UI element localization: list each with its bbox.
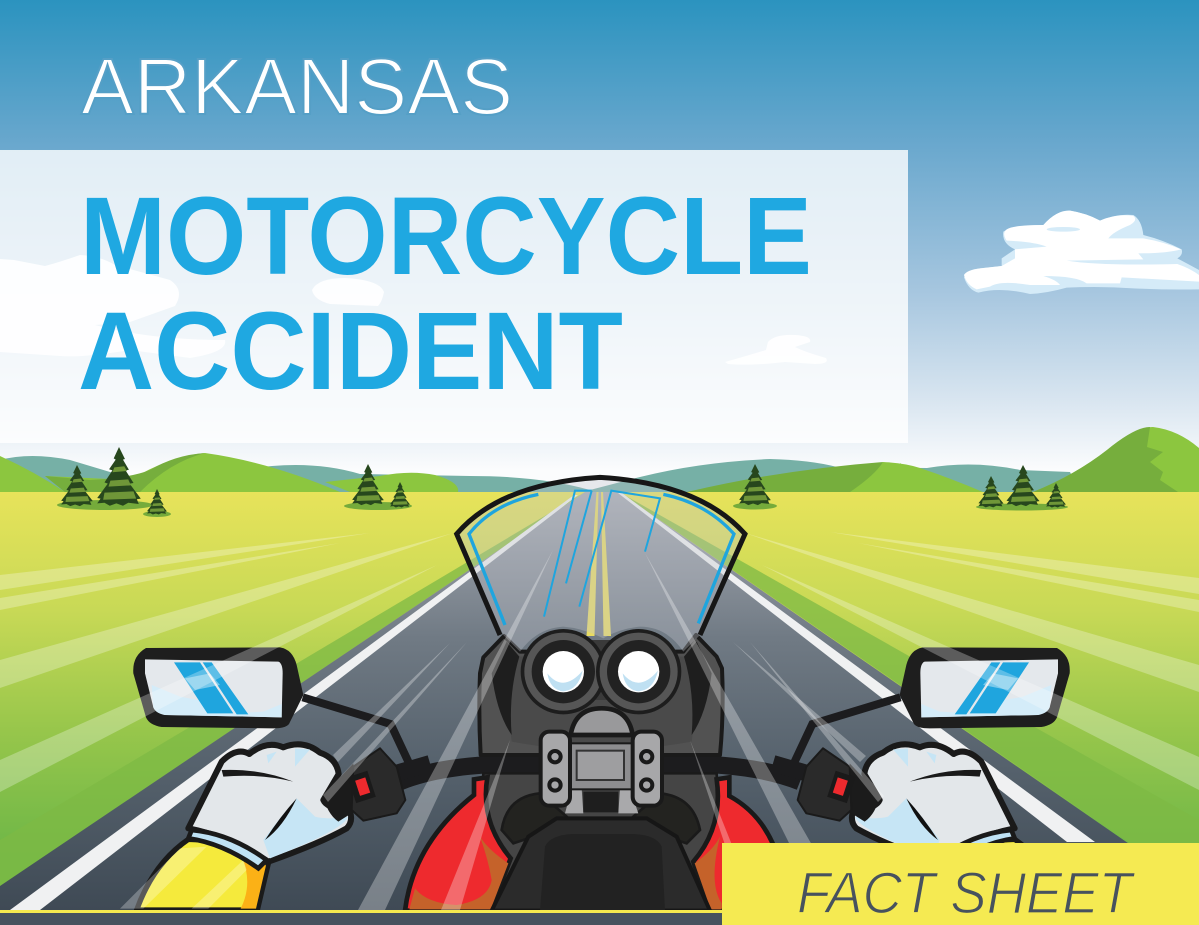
tree: centre-right bbox=[733, 464, 777, 510]
label: FACT SHEET: FACT SHEET bbox=[797, 861, 1135, 925]
fairing right dark panel bbox=[684, 642, 712, 735]
bracket dome bbox=[571, 708, 633, 735]
heading: ARKANSAS: ARKANSAS bbox=[81, 42, 513, 131]
windshield glass bbox=[457, 477, 745, 652]
motorcycle bbox=[400, 477, 800, 911]
bracket plate bbox=[569, 743, 633, 789]
road speed streaks bbox=[323, 550, 884, 910]
glove blue shading bbox=[263, 748, 348, 858]
windshield frame bbox=[457, 477, 745, 635]
cloud: left behind title bbox=[0, 255, 225, 358]
fairing left dark panel bbox=[492, 642, 519, 735]
cloud: upper right bbox=[964, 211, 1199, 294]
mirror stripe highlight bbox=[185, 673, 220, 690]
fairing centre bbox=[510, 657, 693, 750]
right headlight bbox=[596, 629, 681, 714]
heading: MOTORCYCLE: MOTORCYCLE bbox=[80, 175, 812, 298]
sky background bbox=[0, 0, 1199, 500]
road bbox=[0, 492, 1199, 912]
sleeve highlights bbox=[120, 847, 247, 909]
right red fairing bbox=[693, 777, 773, 911]
mirror blue stripes bbox=[174, 662, 248, 714]
bracket screen bbox=[577, 751, 624, 780]
mirror glass bbox=[145, 659, 283, 717]
glove knuckle crease bbox=[222, 770, 293, 782]
trees: centre-left group bbox=[344, 464, 412, 510]
bottom road strip bbox=[0, 913, 1199, 925]
left clamp bbox=[541, 732, 570, 806]
field speed streaks bbox=[0, 532, 1199, 792]
knee pads bbox=[502, 793, 700, 843]
left fairing orange shading bbox=[409, 837, 508, 909]
windshield blue reflections bbox=[469, 491, 734, 625]
title panel bbox=[0, 150, 908, 443]
bracket legs bbox=[565, 788, 638, 813]
rider left side: mirror, glove, grip, sleeve bbox=[120, 647, 430, 910]
cloud: centre behind title bbox=[312, 278, 384, 306]
mirror housing bbox=[133, 647, 303, 728]
bracket centre gap bbox=[583, 792, 618, 812]
grip neck bbox=[323, 763, 357, 822]
trees: right group bbox=[976, 465, 1068, 510]
bottom yellow line bbox=[0, 910, 1199, 914]
grip red switch bbox=[348, 771, 376, 803]
mirror arm bbox=[303, 697, 411, 767]
lower body bbox=[480, 773, 720, 911]
headlight bridge bbox=[587, 640, 617, 700]
left headlight bbox=[521, 629, 606, 714]
road edge lines bbox=[10, 493, 1095, 910]
glove bbox=[188, 744, 351, 862]
sleeve bbox=[137, 839, 268, 910]
left red fairing bbox=[405, 777, 511, 911]
fairing outer bbox=[479, 635, 723, 755]
right fairing orange shading bbox=[695, 837, 722, 909]
mirror sky reflection bbox=[152, 685, 282, 717]
glove palm crease bbox=[265, 798, 297, 840]
bar end bbox=[390, 763, 430, 775]
ground bbox=[0, 492, 1199, 912]
trees: left group bbox=[57, 447, 171, 517]
road verges bbox=[0, 492, 1199, 890]
tank pad bbox=[540, 834, 665, 911]
heading: ACCIDENT: ACCIDENT bbox=[78, 290, 623, 413]
panel: fact sheet tag bbox=[722, 843, 1199, 925]
road centre lines bbox=[586, 492, 611, 636]
cloud: small near title edge bbox=[725, 335, 827, 365]
handlebar bbox=[400, 764, 800, 782]
grip barrel bbox=[352, 748, 405, 821]
sleeve orange shade bbox=[241, 857, 266, 909]
tank bbox=[492, 818, 710, 911]
glove cuff bbox=[188, 830, 267, 868]
right clamp bbox=[633, 732, 662, 806]
rider right side: mirror, glove, grip bbox=[773, 647, 1083, 910]
distant hills bbox=[0, 427, 1199, 492]
